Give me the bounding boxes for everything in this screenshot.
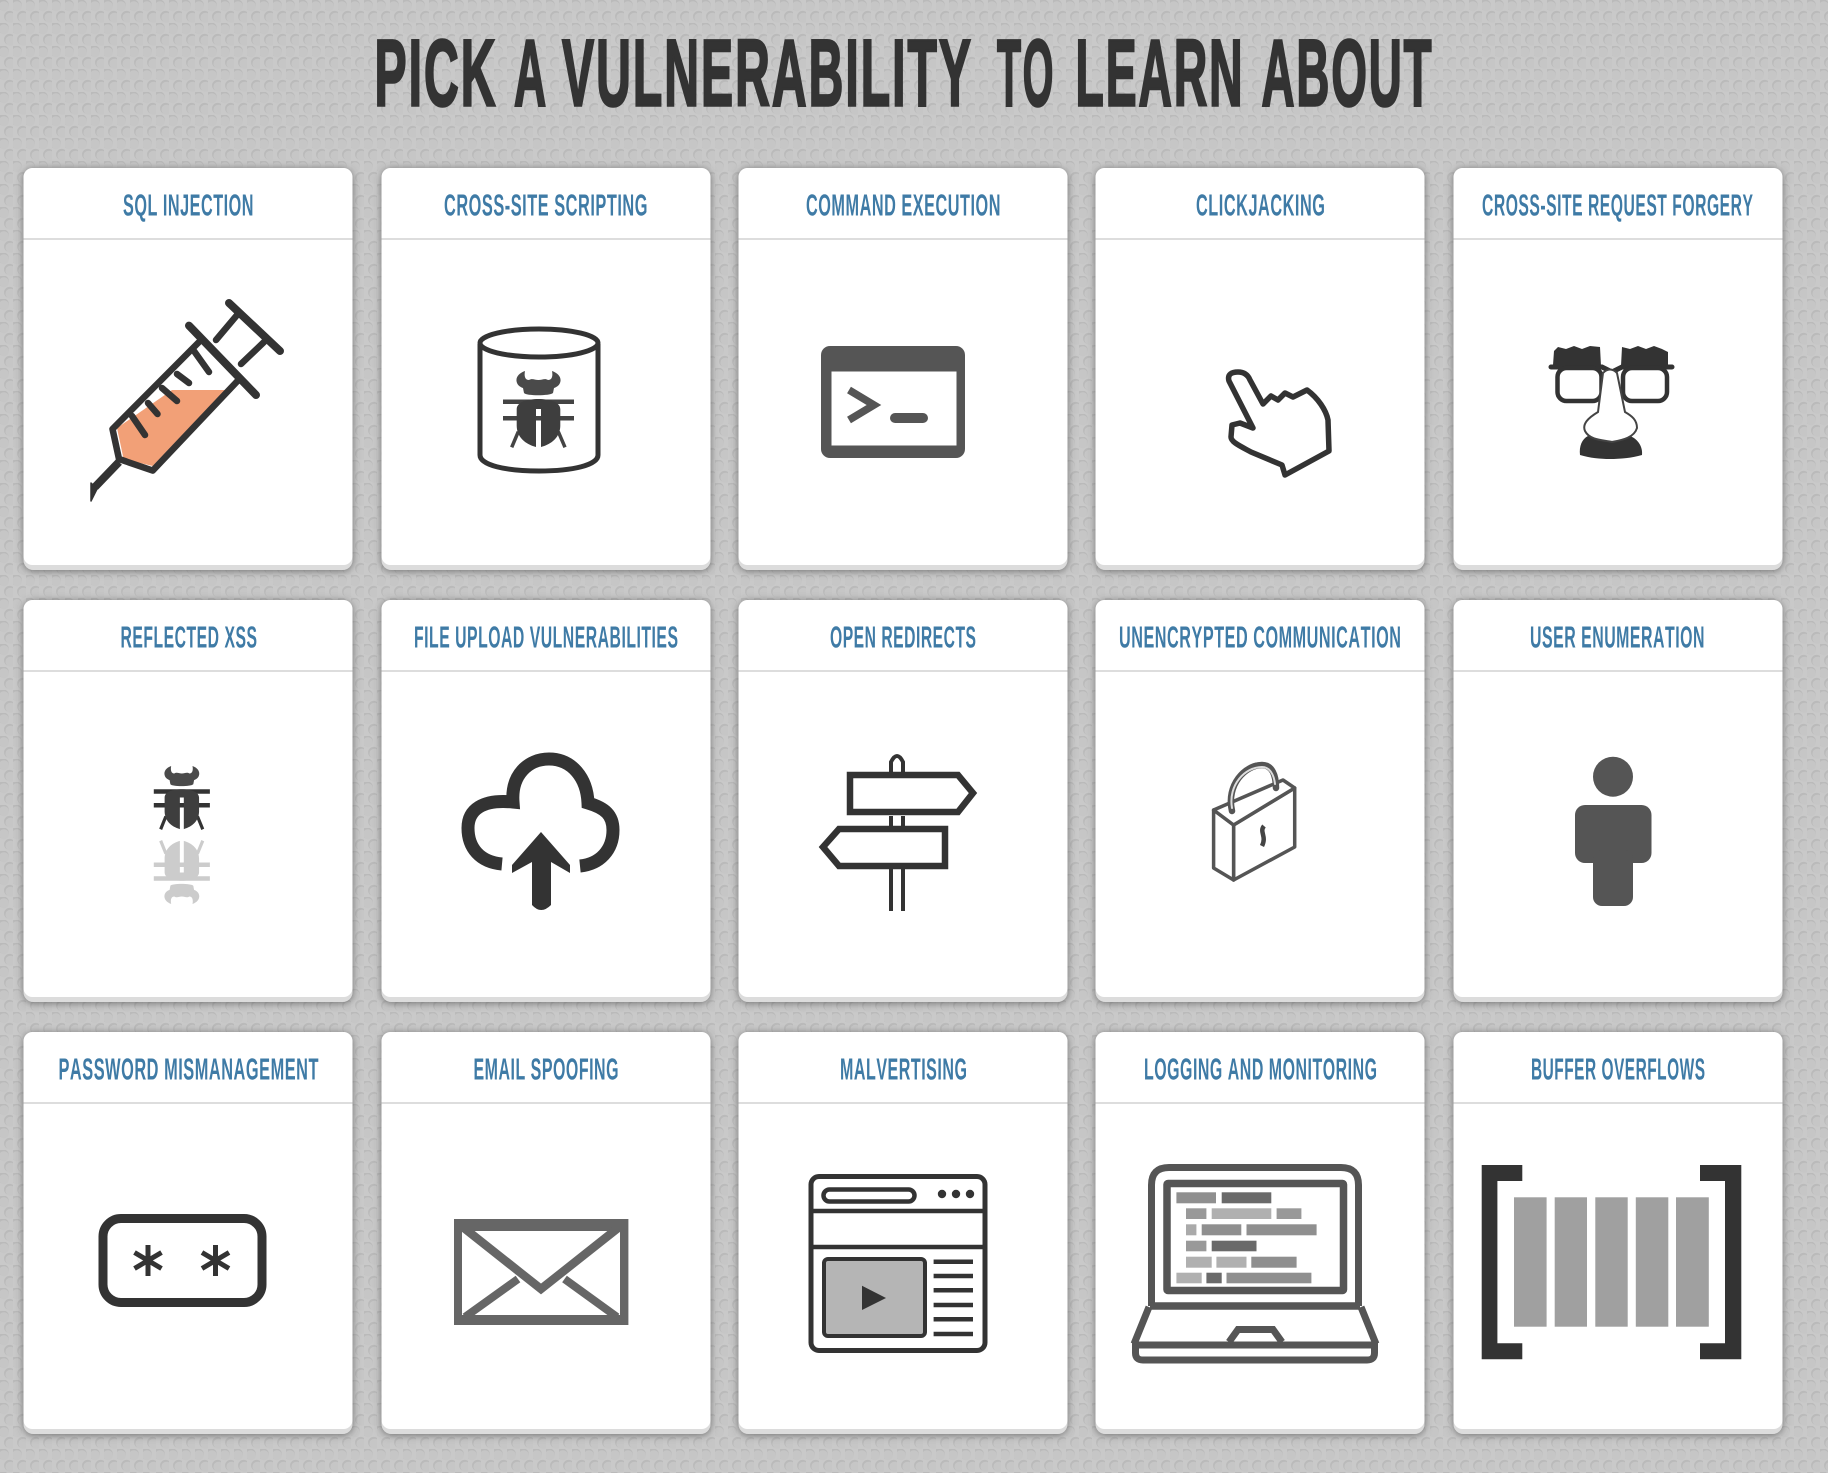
heading: cross-site scripting: CROSS-SITE SCRIPTING [444, 188, 648, 222]
title: A [514, 20, 548, 126]
icon: terminal window [821, 346, 965, 458]
heading: password mismanagement: PASSWORD MISMANAGEMENT [58, 1052, 319, 1086]
title: VULNERABILITY [562, 20, 973, 126]
icon: laptop with log lines [1134, 1168, 1376, 1360]
panel: buffer overflows [1454, 1032, 1782, 1434]
panel: command execution [738, 168, 1068, 570]
icon: disguise glasses [1551, 346, 1672, 459]
panel: cross-site scripting [382, 168, 710, 570]
text: ABOUT [1262, 20, 1434, 126]
panel: user enumeration [1454, 600, 1782, 1002]
panel: unencrypted communication [1096, 600, 1424, 1002]
panel: logging and monitoring [1096, 1032, 1424, 1434]
icon: bracketed buffer [1482, 1165, 1741, 1359]
heading: logging and monitoring: LOGGING AND MONITORING [1144, 1052, 1378, 1086]
heading: file upload vulnerabilities: FILE UPLOAD VULNERABILITIES [414, 620, 678, 654]
heading: SQL injection: SQL INJECTION [123, 188, 254, 222]
panel: open redirects [738, 600, 1068, 1002]
heading: clickjacking: CLICKJACKING [1196, 188, 1326, 222]
title: LEARN [1076, 20, 1244, 126]
heading: reflected XSS: REFLECTED XSS [120, 620, 258, 654]
icon: cloud upload [468, 759, 613, 910]
icon: padlock [1214, 765, 1295, 880]
icon: signpost [823, 756, 973, 911]
heading: unencrypted communication: UNENCRYPTED COMMUNICATION [1119, 620, 1402, 654]
panel: clickjacking [1096, 168, 1424, 570]
panel: password mismanagement [24, 1032, 352, 1434]
heading: open redirects: OPEN REDIRECTS [830, 620, 976, 654]
panel: email spoofing [382, 1032, 710, 1434]
panel: SQL injection [24, 168, 352, 570]
icon: person [1575, 757, 1652, 906]
heading: command execution: COMMAND EXECUTION [806, 188, 1001, 222]
heading: email spoofing: EMAIL SPOOFING [474, 1052, 619, 1086]
heading: malvertising: MALVERTISING [840, 1052, 968, 1086]
panel: cross-site request forgery [1454, 168, 1782, 570]
panel: malvertising [738, 1032, 1068, 1434]
icon: browser window with video [811, 1176, 985, 1350]
title: PICK [374, 20, 498, 126]
panel: file upload vulnerabilities [382, 600, 710, 1002]
panel: reflected XSS [24, 600, 352, 1002]
icon: envelope [454, 1219, 628, 1325]
icon: pointing hand [1229, 372, 1329, 475]
icon: syringe [91, 303, 280, 501]
icon: database with bug [480, 329, 598, 471]
icon: password field [103, 1218, 262, 1302]
title: TO [997, 20, 1055, 126]
icon: bug with reflection [154, 766, 210, 904]
